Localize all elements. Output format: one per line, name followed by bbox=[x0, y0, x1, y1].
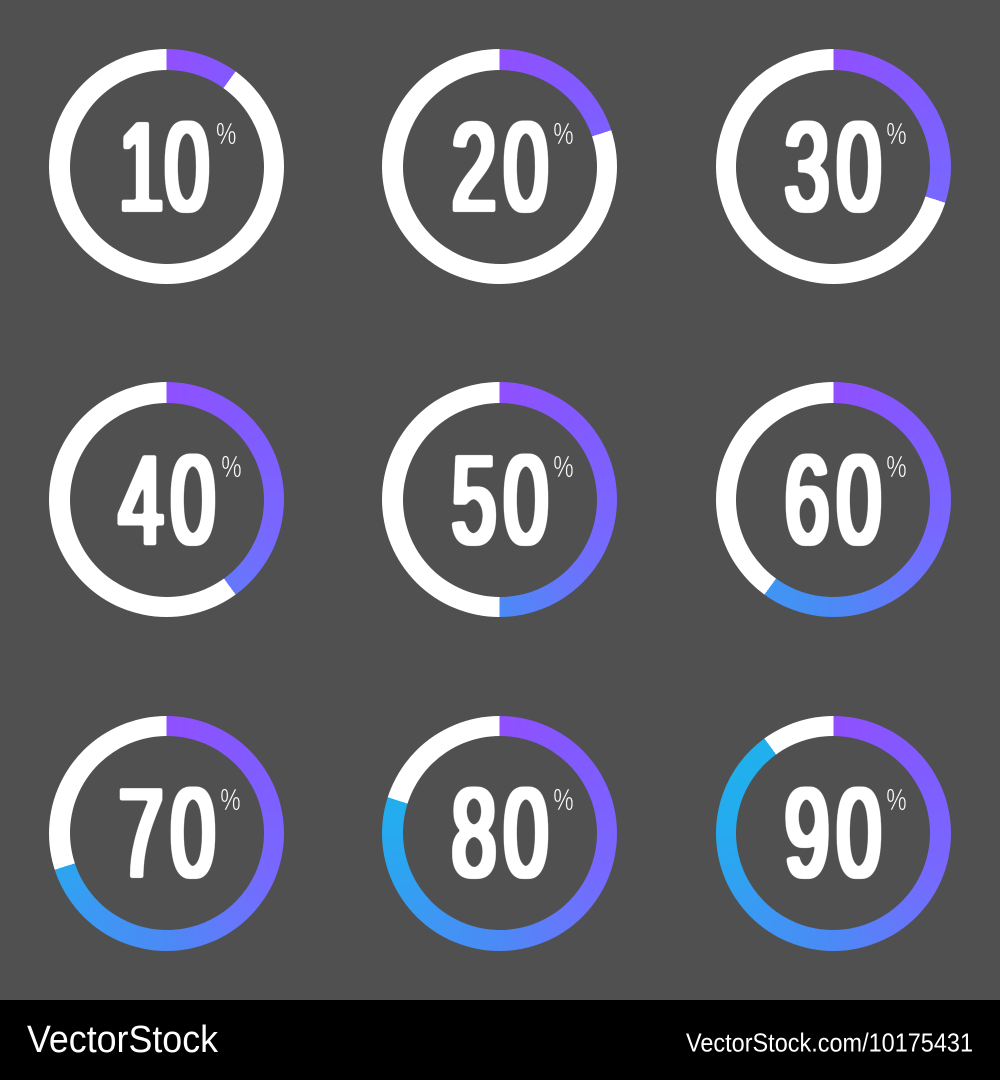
value: 70%: 70 bbox=[118, 764, 222, 904]
value: 10%: % bbox=[216, 115, 236, 151]
value: 20%: % bbox=[553, 115, 573, 151]
dial: 90 percent bbox=[716, 716, 951, 951]
value: 40%: 40 bbox=[118, 430, 222, 570]
ring: 80 percent progress bbox=[382, 716, 617, 951]
dial: 40 percent bbox=[49, 382, 284, 617]
dial: 50 percent bbox=[382, 382, 617, 617]
footer image id: VectorStock.com/10175431 bbox=[686, 1028, 973, 1058]
value: 50%: % bbox=[553, 448, 573, 484]
value: 60%: % bbox=[887, 448, 907, 484]
value: 70%: % bbox=[220, 782, 240, 817]
value: 30%: % bbox=[887, 115, 907, 151]
value: 30%: 30 bbox=[785, 97, 889, 237]
ring: 60 percent progress bbox=[716, 382, 951, 617]
dial: 60 percent bbox=[716, 382, 951, 617]
value: 90%: 90 bbox=[785, 764, 889, 904]
value: 50%: 50 bbox=[451, 430, 555, 570]
footer bar bbox=[0, 1000, 1000, 1080]
ring: 40 percent progress bbox=[49, 382, 284, 617]
ring: 70 percent progress bbox=[49, 716, 284, 951]
dial: 70 percent bbox=[49, 716, 284, 951]
dial: 10 percent bbox=[49, 49, 284, 284]
value: 10%: 10 bbox=[118, 97, 216, 237]
dial: 20 percent bbox=[382, 49, 617, 284]
value: 90%: % bbox=[887, 782, 907, 817]
value: 80%: % bbox=[553, 782, 573, 817]
footer logo text: VectorStock bbox=[27, 1019, 219, 1061]
value: 20%: 20 bbox=[451, 97, 555, 237]
ring: 10 percent progress bbox=[49, 49, 284, 284]
value: 60%: 60 bbox=[785, 430, 889, 570]
dial: 30 percent bbox=[716, 49, 951, 284]
ring: 90 percent progress bbox=[716, 716, 951, 951]
ring: 30 percent progress bbox=[716, 49, 951, 284]
dial: 80 percent bbox=[382, 716, 617, 951]
ring: 20 percent progress bbox=[382, 49, 617, 284]
value: 80%: 80 bbox=[451, 764, 555, 904]
ring: 50 percent progress bbox=[382, 382, 617, 617]
value: 40%: % bbox=[221, 448, 241, 484]
